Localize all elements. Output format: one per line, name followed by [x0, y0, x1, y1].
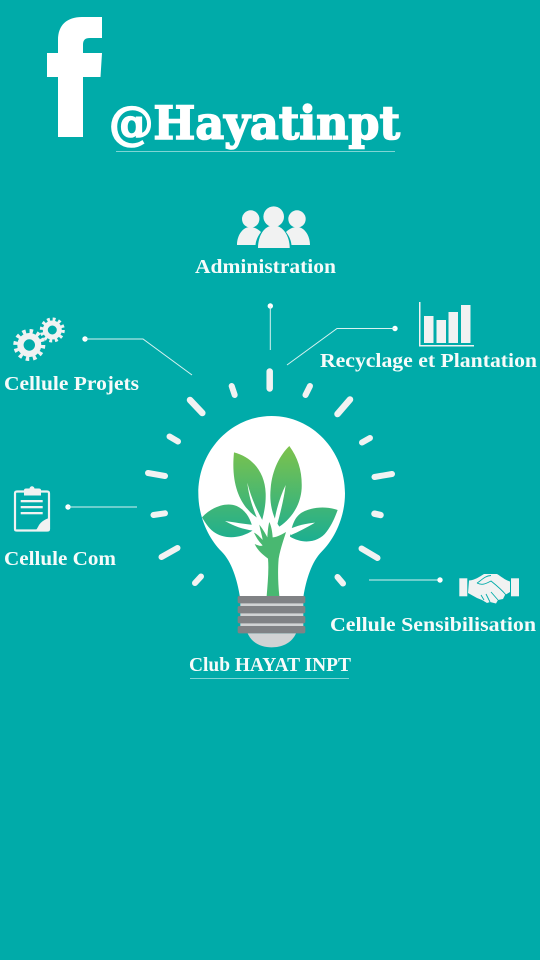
label: Club HAYAT INPT: Club HAYAT INPT	[189, 654, 352, 676]
label: Administration: Administration	[195, 256, 336, 278]
icon: people	[237, 206, 310, 248]
label: Cellule Com: Cellule Com	[4, 548, 116, 570]
screw base	[238, 596, 305, 647]
label underline	[190, 678, 349, 679]
leaf veins	[225, 483, 315, 535]
hand and stem	[254, 522, 286, 596]
lightbulb	[198, 416, 345, 647]
title: facebook handle: @Hayatinpt	[109, 96, 401, 150]
bulb glass	[198, 416, 345, 597]
connector: administration	[268, 303, 273, 350]
rays	[148, 372, 392, 584]
label: Cellule Projets: Cellule Projets	[4, 373, 139, 395]
icon: clipboard	[15, 486, 49, 530]
icon: facebook f	[47, 17, 102, 137]
label: Recyclage et Plantation: Recyclage et Plantation	[320, 350, 537, 372]
title underline	[116, 151, 395, 152]
icon: handshake	[459, 574, 519, 604]
connector: sensibilisation	[369, 577, 443, 583]
connector: recyclage	[287, 326, 398, 365]
label: Cellule Sensibilisation: Cellule Sensibilisation	[330, 614, 536, 636]
leaves	[202, 446, 338, 541]
connector: com	[65, 504, 137, 510]
connector: projets	[82, 336, 192, 375]
icon: bar chart	[419, 302, 474, 346]
icon: gears	[16, 320, 63, 358]
